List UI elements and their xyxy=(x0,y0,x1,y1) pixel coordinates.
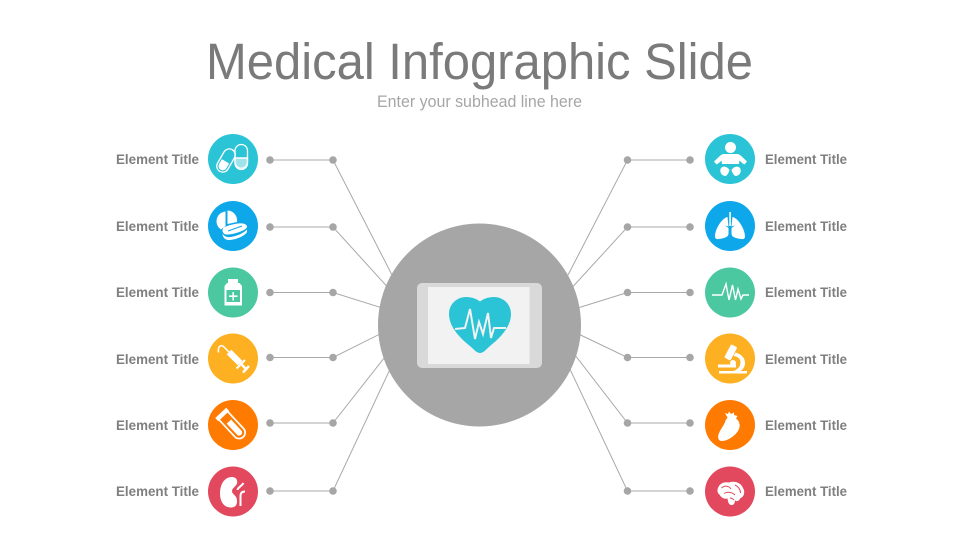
label: Element Title xyxy=(765,417,847,433)
label: Element Title xyxy=(765,151,847,167)
left item 1: capsules xyxy=(116,134,258,184)
label: Element Title xyxy=(116,284,199,300)
central hub xyxy=(378,224,581,426)
right item 6: brain xyxy=(705,466,847,516)
left item 2: pills xyxy=(116,201,258,251)
label: Element Title xyxy=(765,483,847,499)
icon: heart with pulse xyxy=(449,297,511,353)
right item 5: heart organ xyxy=(705,400,847,450)
label: Element Title xyxy=(116,151,199,167)
left item 3: medicine bottle xyxy=(116,268,258,318)
label: Element Title xyxy=(765,351,847,367)
label: Element Title xyxy=(116,417,199,433)
label: Element Title xyxy=(765,218,847,234)
connectors: left xyxy=(270,160,392,491)
right item 3: pulse xyxy=(705,268,847,318)
left item 5: test tube xyxy=(116,400,258,450)
left item 4: syringe xyxy=(116,334,258,384)
left item 6: kidney xyxy=(116,466,258,516)
label: Element Title xyxy=(116,351,199,367)
label: Element Title xyxy=(116,483,199,499)
title: Medical Infographic Slide xyxy=(206,33,753,90)
tablet xyxy=(417,283,542,368)
label: Element Title xyxy=(765,284,847,300)
right item 2: lungs xyxy=(705,201,847,251)
connector dots xyxy=(266,156,694,495)
connectors: right xyxy=(568,160,690,491)
subhead: Enter your subhead line here xyxy=(377,92,582,111)
label: Element Title xyxy=(116,218,199,234)
right item 1: baby xyxy=(705,134,847,184)
right item 4: microscope xyxy=(705,334,847,384)
